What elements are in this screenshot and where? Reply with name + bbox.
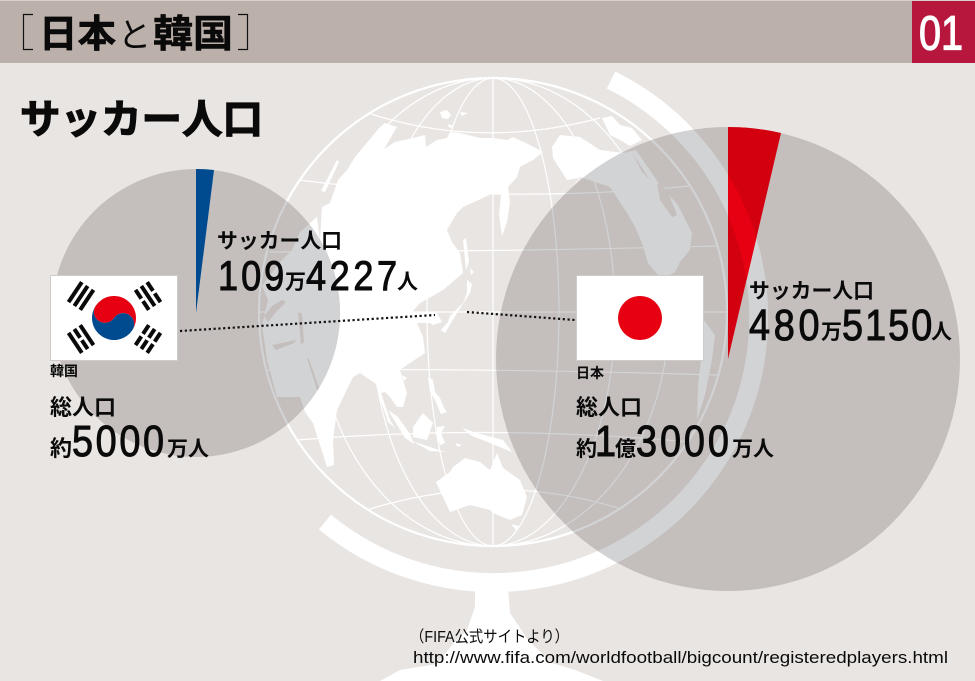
Japan total population label: 日本 <box>576 365 604 381</box>
taegeuk <box>83 287 145 349</box>
Korea total population label: 韓国 <box>50 363 78 379</box>
trigrams <box>67 281 162 354</box>
pie: Korea total population <box>52 169 340 457</box>
Korea total population label: 総人口 <box>50 395 116 420</box>
globe illustration <box>259 78 759 681</box>
Japan total population label: 億 <box>615 438 636 461</box>
header title: 日本 <box>39 14 116 56</box>
Japan total population label <box>576 365 774 466</box>
Korea football population label: 万 <box>285 271 306 294</box>
heading: サッカー人口 <box>20 98 263 142</box>
dotted leader: Korea <box>180 315 435 331</box>
globe map <box>259 78 727 546</box>
source note <box>410 628 948 667</box>
Japan football population label <box>749 280 952 350</box>
Korea total population label: 5000 <box>72 416 164 466</box>
Japan football population label: 万 <box>821 321 842 344</box>
Japan total population label: 総人口 <box>576 395 642 420</box>
Korea total population label: 約 <box>50 436 72 461</box>
Korea football population label: 109 <box>218 254 284 300</box>
header title <box>24 14 248 56</box>
number badge: 01 <box>919 8 963 60</box>
wedge: Korea football population <box>196 169 214 313</box>
Japan football population label: 5150 <box>842 300 932 350</box>
Korea football population label: サッカー人口 <box>217 230 342 253</box>
flag: Japan <box>576 276 704 360</box>
Japan football population label: サッカー人口 <box>749 280 874 303</box>
Korea football population label <box>217 230 418 300</box>
Japan total population label: 約 <box>576 438 597 461</box>
globe ring <box>325 80 759 583</box>
Japan total population label: 3000 <box>636 416 729 466</box>
Japan football population label: 人 <box>931 321 952 344</box>
Japan total population label: 万人 <box>732 438 774 461</box>
flag: Korea <box>50 276 178 360</box>
Japan football population label: 480 <box>749 300 820 350</box>
source note: http://www.fifa.com/worldfootball/bigcount/registeredplayers.html <box>413 648 948 667</box>
dotted leader: Japan <box>467 312 575 320</box>
header title: 韓国 <box>153 14 233 56</box>
wedge: Japan football population <box>728 127 781 359</box>
Korea total population label <box>50 363 209 466</box>
pie: Japan total population <box>496 127 960 591</box>
header title: と <box>118 17 151 55</box>
Korea football population label: 4227 <box>306 254 397 300</box>
globe stand <box>380 588 603 681</box>
Japan total population label: 1 <box>595 416 616 466</box>
Korea total population label: 万人 <box>167 438 209 461</box>
Korea football population label: 人 <box>397 271 418 294</box>
header bar <box>0 0 975 63</box>
source note: （FIFA公式サイトより） <box>410 628 569 646</box>
globe seen through pies <box>258 130 768 562</box>
